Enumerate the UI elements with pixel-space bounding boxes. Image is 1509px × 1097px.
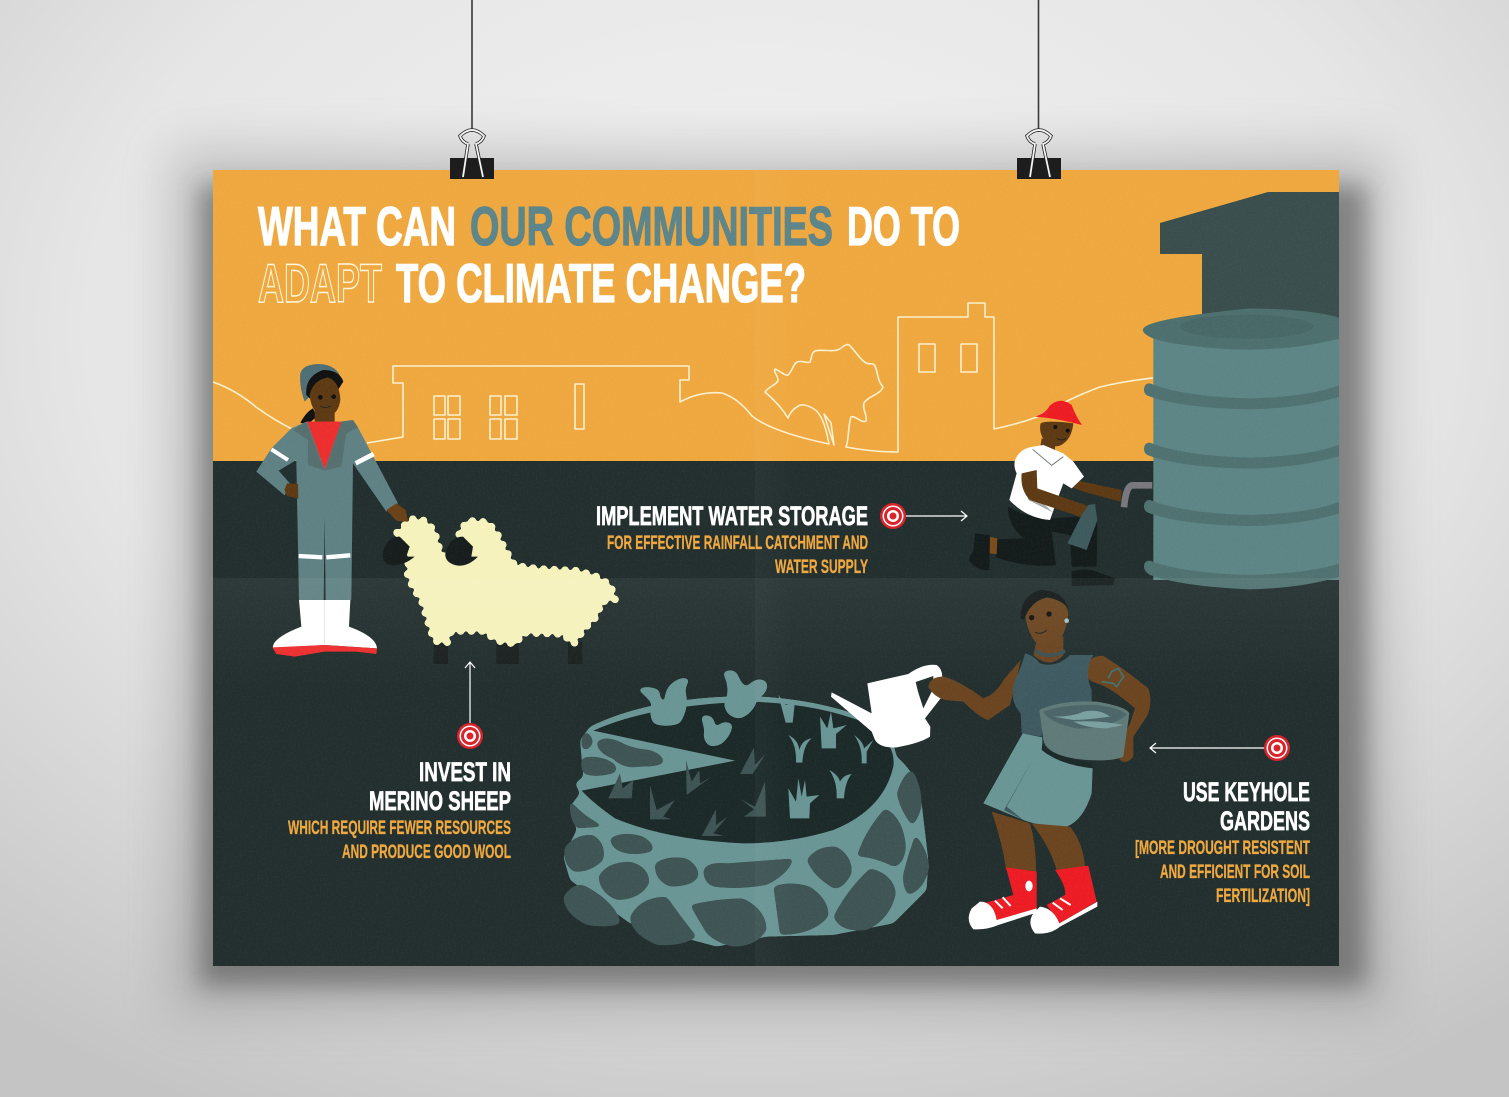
title: TO CLIMATE CHANGE?: [396, 252, 806, 314]
description: FERTILIZATION]: [1216, 886, 1310, 907]
red shoes: [983, 867, 1037, 920]
description: [1135, 838, 1310, 907]
title: [258, 206, 959, 304]
description: FOR EFFECTIVE RAINFALL CATCHMENT AND: [607, 533, 868, 554]
target icon and arrow: [880, 503, 967, 529]
title: OUR COMMUNITIES: [470, 195, 833, 257]
neck and head: [1033, 637, 1063, 662]
hanging strings: [472, 0, 1038, 132]
description: [288, 820, 511, 858]
water tank house silhouette: [1160, 192, 1339, 330]
shrubs on wall: [637, 670, 767, 746]
sheep faces: [383, 537, 415, 565]
water tank: [1124, 308, 1340, 589]
binder clip right: [1017, 130, 1061, 179]
sheep pair: [383, 519, 615, 664]
description: AND EFFICIENT FOR SOIL: [1160, 862, 1310, 883]
heading: MERINO SHEEP: [369, 786, 511, 816]
dark dried plants: [608, 747, 766, 836]
title: ADAPT: [258, 252, 382, 314]
figure: woman with watering can: [831, 590, 1150, 934]
top: [1013, 653, 1093, 737]
heading: IMPLEMENT WATER STORAGE: [596, 501, 868, 531]
heading: [370, 762, 511, 811]
heading: GARDENS: [1220, 806, 1310, 836]
legs: [992, 812, 1036, 873]
background building outlines: [213, 303, 1153, 452]
description: AND PRODUCE GOOD WOOL: [342, 842, 511, 863]
sheep body: [397, 519, 615, 644]
poster shadow: [172, 150, 1388, 1012]
heading: [1184, 782, 1310, 831]
panel: dark ground: [213, 461, 1339, 966]
description: WATER SUPPLY: [775, 557, 868, 578]
skirt and belt: [983, 733, 1093, 827]
title: WHAT CAN: [258, 195, 456, 257]
heading: INVEST IN: [419, 757, 511, 787]
description: [608, 535, 868, 574]
panel: orange sky: [213, 170, 1339, 461]
block: merino sheep: [288, 662, 511, 863]
title: DO TO: [847, 195, 960, 257]
bowl: [1039, 701, 1129, 760]
sheep legs: [434, 642, 582, 664]
stones: [563, 732, 929, 947]
target icon and arrow: [457, 662, 483, 749]
figure: man with red hat kneeling: [969, 401, 1122, 586]
keyhole garden: [563, 670, 929, 947]
watering can: [831, 665, 942, 747]
poster: [213, 170, 1340, 966]
block: water storage: [596, 501, 967, 578]
target icon and arrow: [1150, 735, 1290, 761]
arms: [928, 660, 1021, 720]
block: keyhole gardens: [1135, 735, 1310, 907]
tap: [1124, 485, 1152, 507]
description: [MORE DROUGHT RESISTENT: [1135, 838, 1310, 859]
green plants: [778, 695, 873, 818]
binder clip left: [450, 130, 494, 179]
description: WHICH REQUIRE FEWER RESOURCES: [288, 818, 511, 839]
heading: USE KEYHOLE: [1183, 777, 1310, 807]
figure: woman in overalls: [256, 364, 408, 657]
